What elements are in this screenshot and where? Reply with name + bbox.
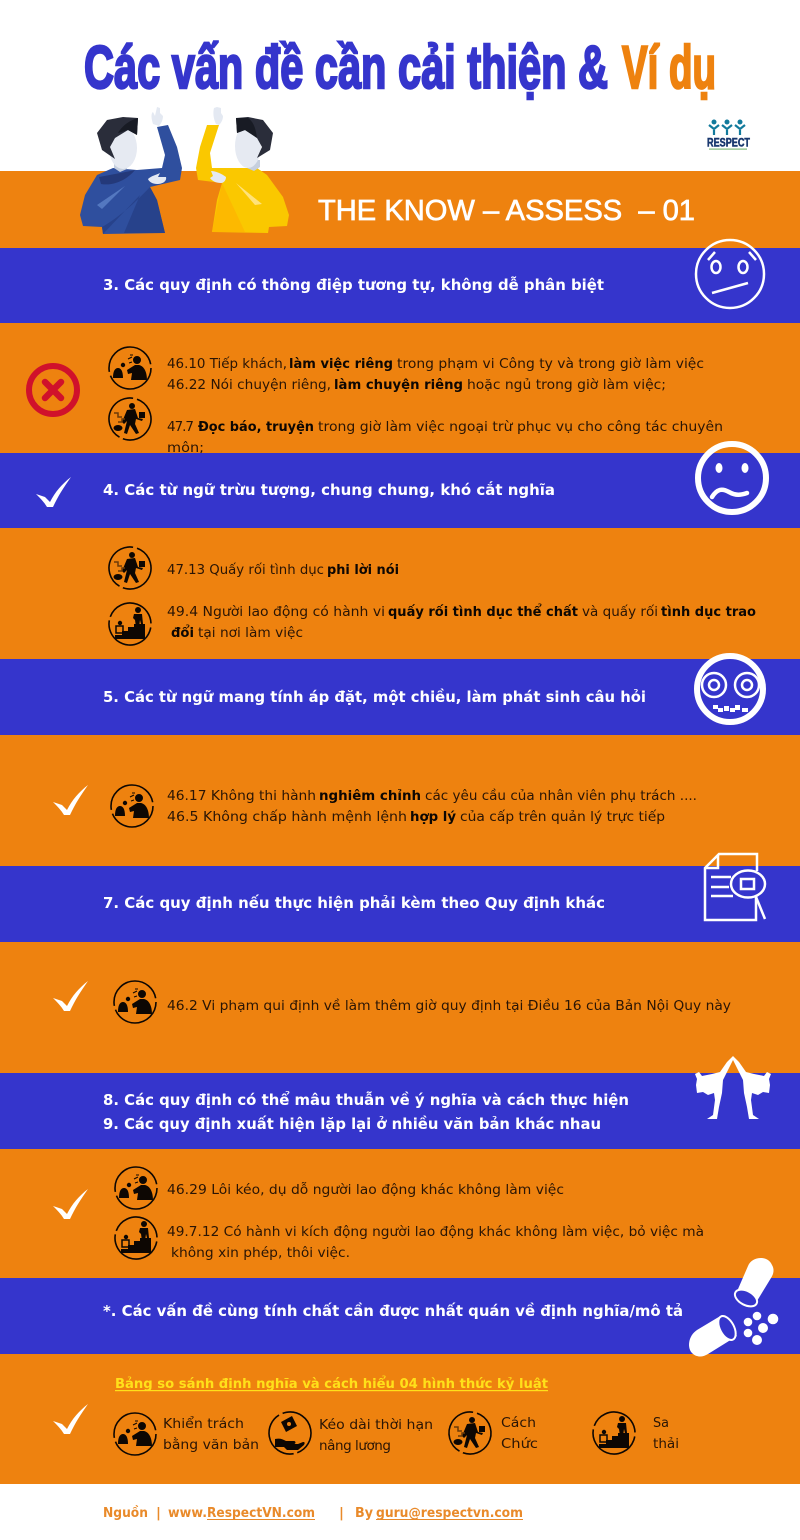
text: rule 49.4: tại nơi làm việc [198, 625, 303, 641]
text: rule 49.7.12: 49.7.12 Có hành vi kích động người lao động khác không làm việc, bỏ việc mà [167, 1224, 704, 1240]
item: reprimand: Khiển trách [163, 1415, 244, 1432]
icon: stairs [103, 597, 157, 651]
blue band comparison [0, 1278, 800, 1354]
text: rule 46.5: hợp lý [410, 809, 456, 825]
footer: source: guru@respectvn.com [376, 1505, 523, 1521]
text: rule 49.4: 49.4 Người lao động có hành vi [167, 604, 385, 620]
text: rule 47.13: phi lời nói [327, 562, 399, 578]
icon: check [53, 785, 88, 815]
panel: orange header band [0, 171, 800, 248]
link heading: comparison table: Bảng so sánh định nghĩa và cách hiểu 04 hình thức kỷ luật [115, 1375, 549, 1392]
item: salary delay [266, 1409, 433, 1457]
blue band 8-9 [0, 1073, 800, 1149]
text: rule 49.4: đổi [171, 624, 194, 641]
text: rule 47.7: 47.7 [167, 419, 194, 435]
footer: source: | [156, 1505, 161, 1521]
footer: source: www. [168, 1505, 207, 1521]
item: salary delay: nâng lương [319, 1438, 391, 1454]
icon: check [53, 1404, 88, 1434]
icon: document with magnifier [705, 854, 765, 920]
text: rule 46.22 [167, 377, 666, 393]
panel: orange content comparison [0, 1354, 800, 1484]
text: rule 46.5: của cấp trên quản lý trực tiếp [460, 808, 665, 825]
blue band 3 [0, 248, 800, 323]
heading: comparison: *. Các vấn đề cùng tính chất cần được nhất quán về định nghĩa/mô tả [103, 1301, 683, 1320]
text: rule 49.7.12 [167, 1224, 704, 1261]
text: rule 47.13 [167, 561, 399, 578]
text: rule 49.4: và quấy rối [582, 603, 658, 620]
text: rule 46.10 [167, 355, 704, 372]
logo: Respect: RESPECT [707, 138, 750, 150]
footer: source: | [339, 1505, 344, 1521]
text: rule 47.7: trong giờ làm việc ngoại trừ phục vụ cho công tác chuyên [318, 419, 723, 435]
text: rule 46.17: nghiêm chỉnh [319, 788, 421, 804]
item: dismissal [587, 1406, 679, 1460]
icon: check [53, 981, 88, 1011]
panel: orange content 8-9 [0, 1149, 800, 1278]
panel: orange content 5 [0, 735, 800, 866]
heading 4: 4. Các từ ngữ trừu tượng, chung chung, khó cắt nghĩa [103, 480, 555, 499]
icon: confused face [696, 240, 764, 308]
text: rule 49.4: quấy rối tình dục thể chất [388, 603, 579, 620]
text: rule 46.2: 46.2 Vi phạm qui định về làm thêm giờ quy định tại Điều 16 của Bản Nội Quy này [167, 997, 731, 1014]
item: demotion [441, 1404, 538, 1462]
text: rule 46.29: 46.29 Lôi kéo, dụ dỗ người lao động khác không làm việc [167, 1181, 564, 1198]
icon: talk [115, 1167, 157, 1209]
text: rule 46.10: làm việc riêng [289, 356, 393, 372]
icon: talk [109, 347, 151, 389]
icon: talk [114, 981, 156, 1023]
text: rule 46.17: các yêu cầu của nhân viên phụ trách .... [425, 788, 697, 804]
item: reprimand: bằng văn bản [163, 1436, 259, 1453]
panel: orange content 4 [0, 528, 800, 659]
item: demotion: Chức [501, 1436, 538, 1452]
text: rule 46.5: 46.5 Không chấp hành mệnh lệnh [167, 809, 407, 825]
icon: runner [101, 390, 159, 448]
panel: orange content 7 [0, 942, 800, 1073]
footer: source [103, 1504, 523, 1521]
footer: source: By [355, 1505, 373, 1521]
blue band 5 [0, 659, 800, 735]
heading 7: 7. Các quy định nếu thực hiện phải kèm theo Quy định khác [103, 893, 605, 912]
item: reprimand [114, 1413, 259, 1455]
text: rule 47.7: Đọc báo, truyện [198, 419, 314, 435]
text: rule 46.17 [167, 788, 697, 804]
text: rule 46.22: hoặc ngủ trong giờ làm việc; [467, 377, 666, 393]
icon: check [36, 477, 71, 507]
heading 8: 8. Các quy định có thể mâu thuẫn về ý nghĩa và cách thực hiện [103, 1090, 629, 1109]
item: salary delay: Kéo dài thời hạn [319, 1417, 433, 1433]
blue band 4 [0, 453, 800, 528]
icon: open capsule [689, 1258, 778, 1356]
text: rule 46.10: 46.10 Tiếp khách, [167, 355, 287, 372]
text: rule 46.22: 46.22 Nói chuyện riêng, [167, 377, 331, 393]
icon: karate high kick [695, 1056, 771, 1119]
text: rule 46.22: làm chuyện riêng [334, 377, 463, 393]
icon: stairs [109, 1211, 163, 1265]
icon: runner [101, 539, 159, 597]
icon: error cross [29, 366, 77, 414]
heading 9: 9. Các quy định xuất hiện lặp lại ở nhiều văn bản khác nhau [103, 1114, 601, 1133]
text: clipped line of rule 47.7: môn; [167, 440, 204, 456]
item: dismissal: Sa [653, 1415, 669, 1431]
heading 3: 3. Các quy định có thông điệp tương tự, không dễ phân biệt [103, 276, 605, 294]
blue band 7 [0, 866, 800, 942]
heading 5: 5. Các từ ngữ mang tính áp đặt, một chiều, làm phát sinh câu hỏi [103, 687, 646, 706]
heading: The Know - Assess: THE KNOW – ASSESS – 01 [318, 195, 695, 227]
text: rule 46.5 [167, 808, 665, 825]
icon: sad face [698, 444, 766, 512]
illustration: two people high five [80, 107, 289, 234]
text: rule 49.4: tình dục trao [661, 604, 756, 620]
footer: source: Nguồn [103, 1504, 148, 1521]
panel: orange content 3 [0, 323, 800, 453]
text: rule 47.13: 47.13 Quấy rối tình dục [167, 561, 324, 578]
icon: check [53, 1189, 88, 1219]
logo: Respect [707, 120, 750, 150]
item: demotion: Cách [501, 1415, 536, 1431]
icon: talk [111, 785, 153, 827]
footer: source: RespectVN.com [207, 1505, 315, 1521]
text: rule 49.4 [167, 603, 756, 641]
text: rule 49.7.12: không xin phép, thôi việc. [171, 1245, 350, 1261]
icon: dizzy face [697, 656, 763, 722]
item: dismissal: thải [653, 1436, 679, 1452]
title: Ví dụ [622, 34, 716, 101]
text: rule 46.10: trong phạm vi Công ty và trong giờ làm việc [397, 356, 704, 372]
text: rule 46.17: 46.17 Không thi hành [167, 788, 316, 804]
